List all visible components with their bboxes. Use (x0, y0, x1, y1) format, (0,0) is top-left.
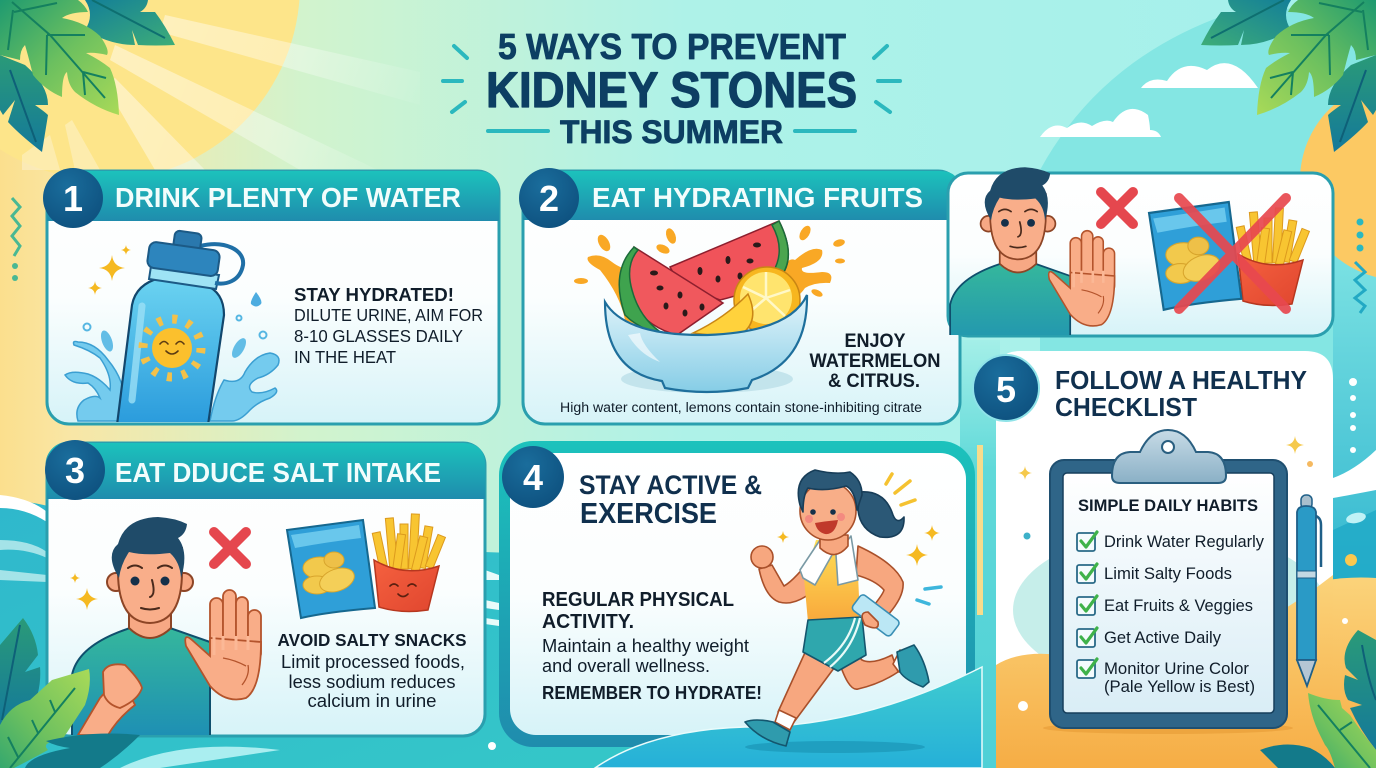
illustration: man raising hand (949, 167, 1116, 335)
checklist items (1104, 533, 1265, 696)
number badge 3 (45, 440, 105, 500)
number badge 1: 1 (63, 178, 83, 219)
heading 5 (1055, 365, 1307, 422)
leaves bottom left (0, 618, 140, 768)
text block 4 (542, 589, 762, 703)
text block 1: 8-10 GLASSES DAILY (294, 326, 463, 346)
sun with rays (0, 0, 420, 190)
heading 1: DRINK PLENTY OF WATER (115, 182, 461, 213)
icon: chip bag (287, 520, 375, 618)
panel 4: stay active and exercise (499, 441, 982, 768)
panel 2: eat hydrating fruits (519, 168, 960, 424)
water waves bottom left (0, 495, 720, 768)
text block 3: Limit processed foods, (281, 652, 465, 672)
illustration: man raising hand with fist (72, 517, 261, 745)
text block 2: WATERMELON (810, 350, 940, 372)
text block 1: STAY HYDRATED! (294, 284, 454, 305)
number badge 3: 3 (65, 450, 85, 491)
text block 1: IN THE HEAT (294, 347, 396, 367)
checklist items: Limit Salty Foods (1104, 565, 1232, 583)
text block 3: less sodium reduces (288, 672, 456, 692)
checklist items: Get Active Daily (1104, 629, 1222, 647)
illustration: running woman (745, 470, 929, 753)
title: THIS SUMMER (560, 114, 783, 150)
heading 4: STAY ACTIVE & (579, 470, 762, 500)
icon: sparkles and dots 5 (1018, 436, 1313, 711)
text block 4: and overall wellness. (542, 656, 710, 676)
heading 4: EXERCISE (580, 498, 717, 530)
heading 5: FOLLOW A HEALTHY (1055, 365, 1307, 395)
clipboard (1043, 430, 1293, 734)
text block 3: calcium in urine (308, 691, 436, 711)
panel 1: drink plenty of water (43, 168, 499, 425)
leaves top right (1201, 0, 1376, 152)
text block 2 (560, 330, 940, 415)
number badge 5: 5 (996, 369, 1016, 410)
title: 5 WAYS TO PREVENT (498, 26, 846, 67)
icon: red cross 3 (214, 532, 246, 564)
icon: sparkles 3 (70, 573, 98, 610)
icon: sparkles and droplets 1 (84, 245, 266, 338)
checklist items: Drink Water Regularly (1104, 533, 1265, 551)
number badge 1 (43, 168, 103, 228)
text block 1 (294, 284, 483, 367)
icon: sun on bottle (143, 319, 201, 377)
clipboard clip (1112, 430, 1226, 483)
text block 1: DILUTE URINE, AIM FOR (294, 305, 483, 325)
title (443, 26, 900, 150)
icon: pen (1297, 495, 1321, 686)
panel: stop salty snacks (946, 167, 1334, 338)
leaves top left (0, 0, 175, 152)
wave under runner (595, 667, 982, 768)
number badge 2 (519, 168, 579, 228)
text block 4: REMEMBER TO HYDRATE! (542, 683, 762, 703)
number badge 2: 2 (539, 178, 559, 219)
checklist items: (Pale Yellow is Best) (1104, 678, 1255, 696)
checklist items: Monitor Urine Color (1104, 660, 1250, 678)
clouds (1040, 63, 1258, 137)
icon: snacks crossed out (1149, 198, 1309, 310)
leaves bottom right (1260, 630, 1376, 768)
panel 3: reduce salt intake (45, 440, 485, 745)
panel 5: healthy checklist (973, 351, 1333, 768)
icon: sparkles and motion marks 4 (777, 474, 941, 604)
title: KIDNEY STONES (486, 62, 857, 118)
icon: water bottle with splash (65, 230, 279, 425)
icon: red cross (1101, 192, 1133, 224)
heading 3: EAT DDUCE SALT INTAKE (115, 457, 441, 488)
number badge 4: 4 (523, 457, 543, 498)
checklist heading: SIMPLE DAILY HABITS (1078, 496, 1258, 515)
heading 2: EAT HYDRATING FRUITS (592, 182, 923, 213)
heading 5: CHECKLIST (1055, 392, 1197, 422)
text block 2: High water content, lemons contain stone-inhibiting citrate (560, 400, 922, 415)
text block 4: Maintain a healthy weight (542, 636, 749, 656)
text block 2: & CITRUS. (828, 370, 920, 392)
number badge 5 (973, 355, 1039, 421)
number badge 4 (502, 446, 564, 508)
text block 4: ACTIVITY. (542, 611, 634, 633)
text block 2: ENJOY (844, 330, 906, 352)
icon: fruit bowl (574, 221, 846, 393)
icon: smiling fries (372, 514, 445, 611)
text block 4: REGULAR PHYSICAL (542, 589, 734, 611)
checkboxes (1077, 532, 1097, 678)
checklist items: Eat Fruits & Veggies (1104, 597, 1253, 615)
heading 4 (579, 470, 762, 530)
text block 3 (278, 630, 466, 711)
text block 3: AVOID SALTY SNACKS (278, 630, 466, 650)
